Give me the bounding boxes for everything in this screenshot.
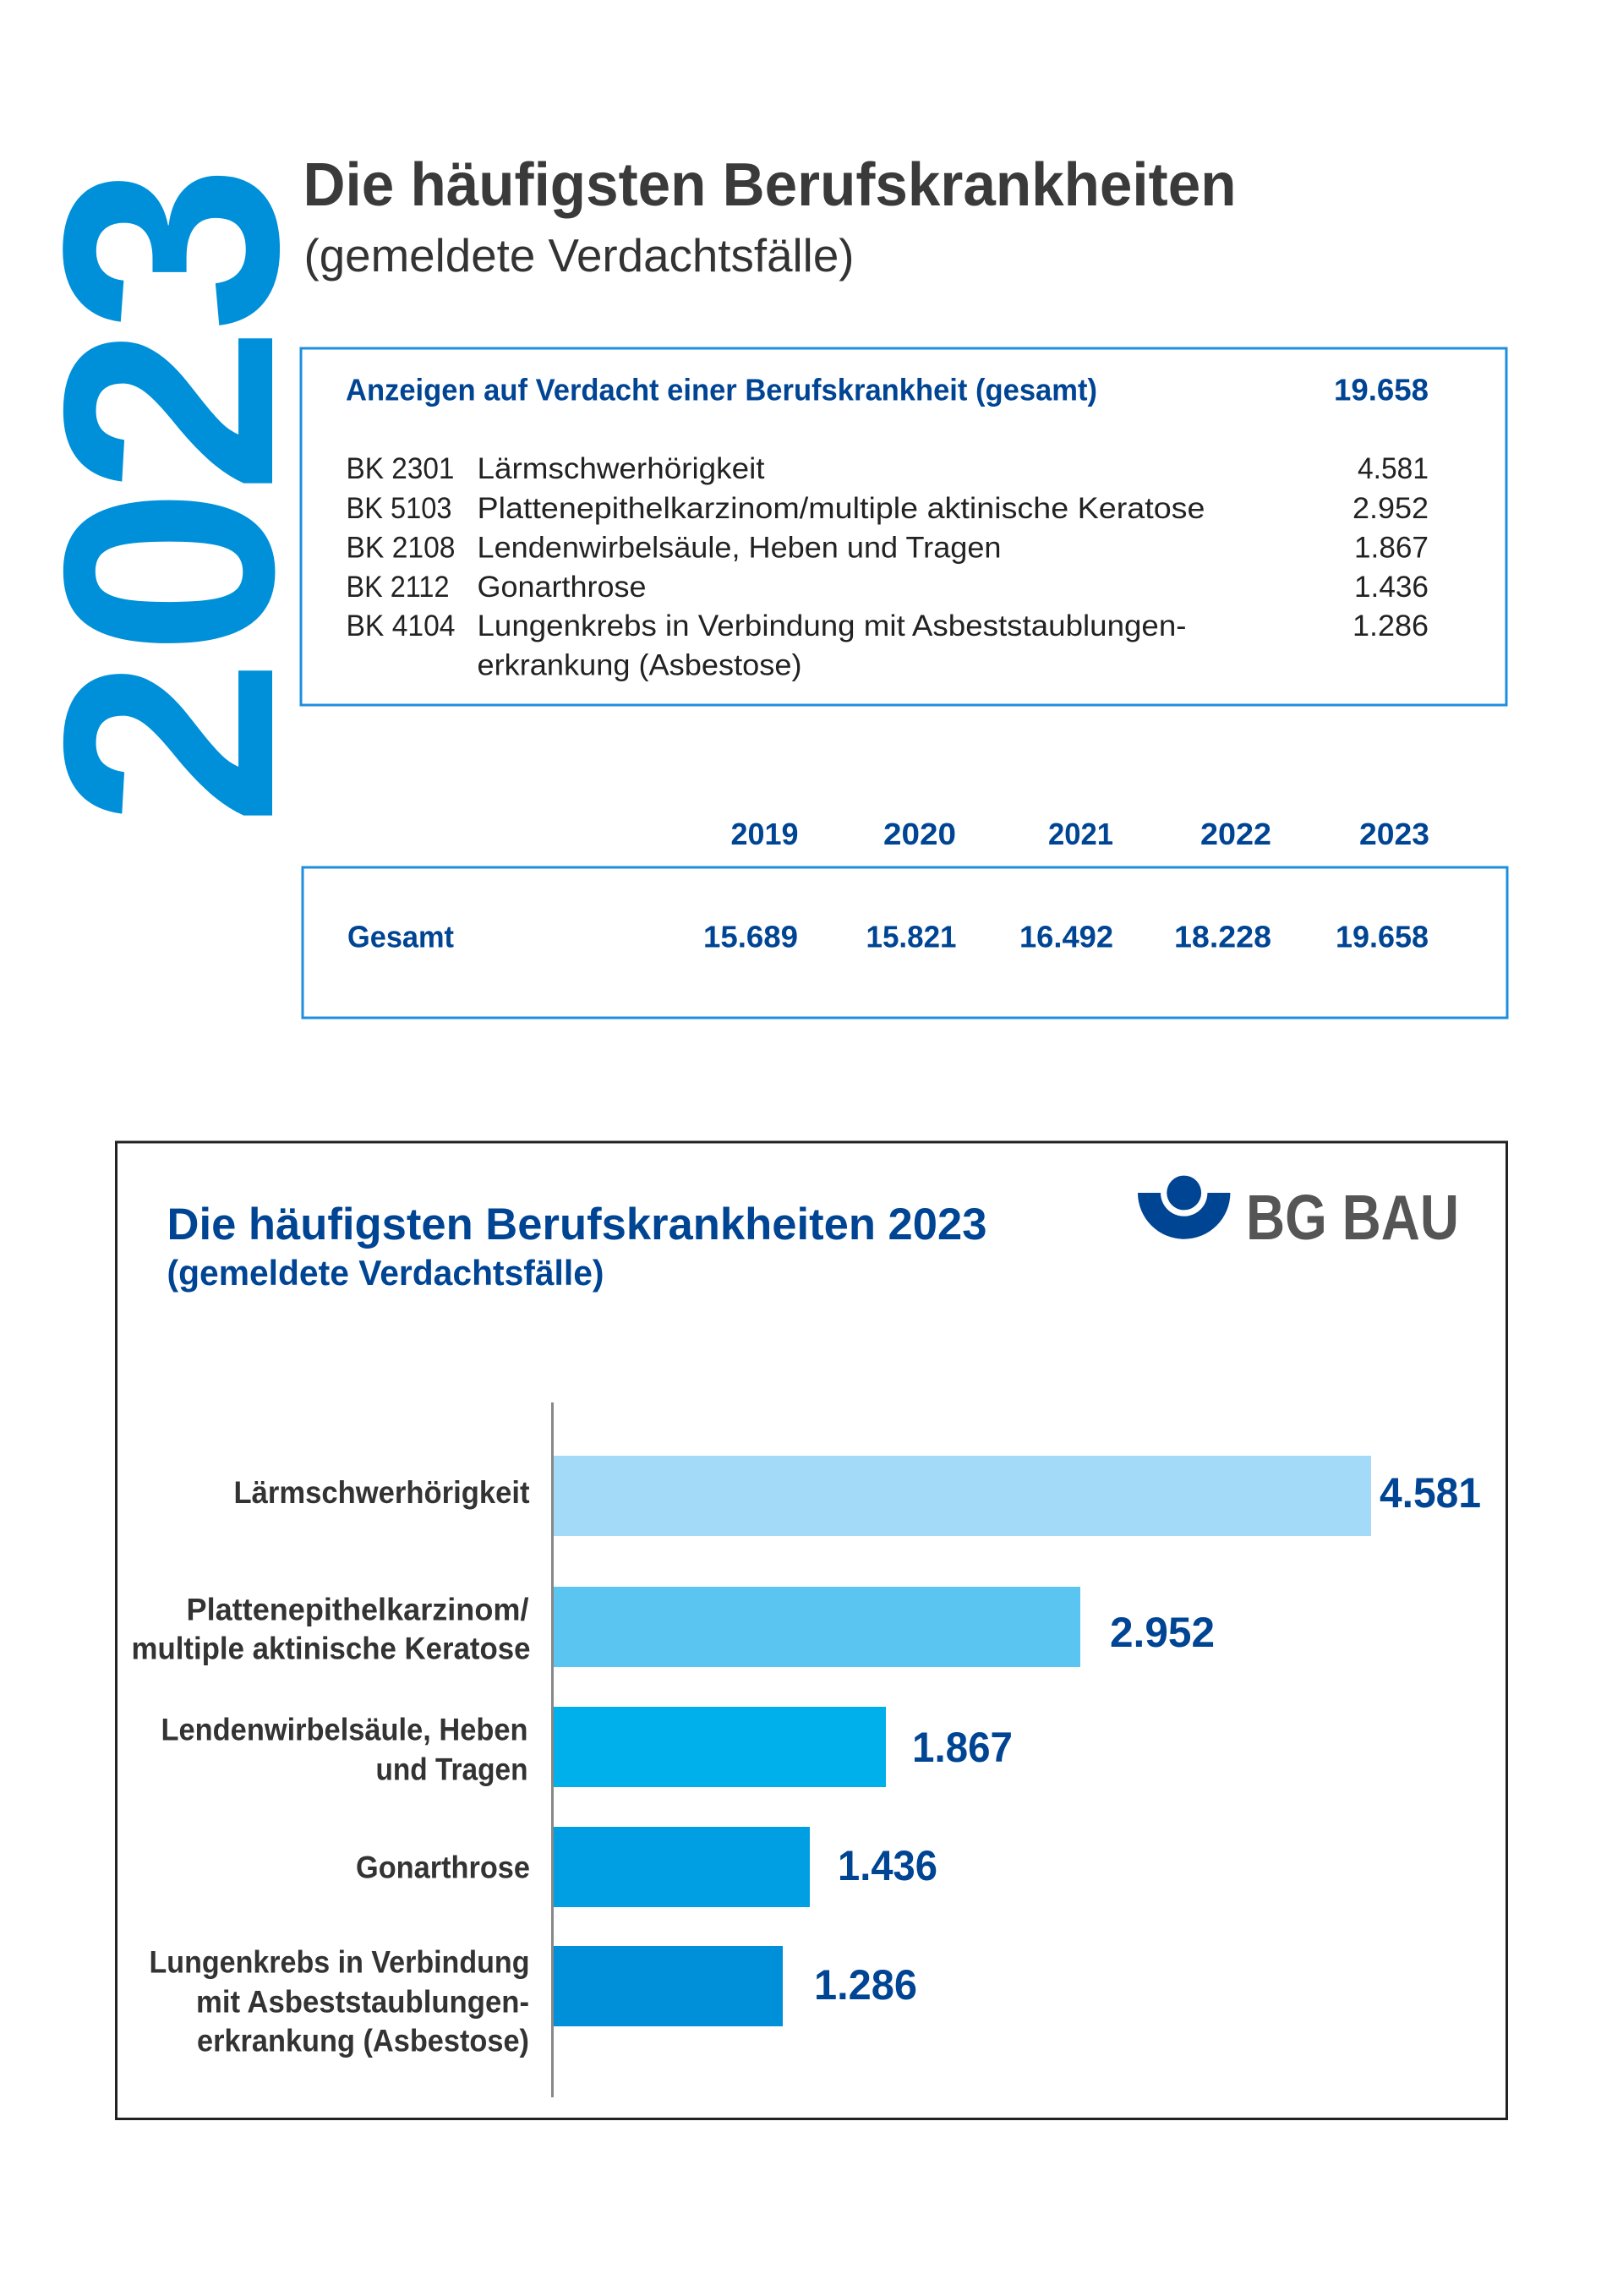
year header row: 2019 [730,817,798,851]
panel: bar chart card [117,1142,1506,2118]
totals row: Gesamt [347,920,454,954]
row: BK 4104: 1.286 [1352,609,1429,642]
bar row: Lungenkrebs: 1.286 [814,1961,917,2009]
panel: reported cases 2023 [301,348,1506,705]
row: BK 2108: 1.867 [1354,531,1429,565]
bar row: Lendenwirbelsäule: 1.867 [912,1724,1013,1771]
panel: totals per year [303,867,1507,1018]
row: BK 2108 [347,531,1429,565]
total row: 19.658 [1334,372,1429,407]
totals row: 18.228 [1174,920,1271,954]
panel border [301,348,1506,705]
bar row: Lendenwirbelsäule: und Tragen [375,1752,527,1787]
row: BK 4104: BK 4104 [347,609,455,642]
totals row: 19.658 [1336,920,1429,954]
bar row: Gonarthrose: 1.436 [838,1842,937,1889]
row: BK 2112: BK 2112 [347,570,450,604]
big rotated year 2023: 3 [0,165,342,332]
row: BK 2112: 1.436 [1354,570,1429,604]
row: BK 2108: BK 2108 [347,531,455,565]
totals row: 15.689 [703,920,798,954]
chart heading: Die häufigsten Berufskrankheiten 2023 [167,1200,987,1249]
row: BK 4104: Lungenkrebs in Verbindung mit Asbeststaublungen- [477,609,1187,642]
year header row: 2021 [1048,817,1113,851]
row: BK 2108: Lendenwirbelsäule, Heben und Tragen [477,531,1001,565]
row: BK 2301: Lärmschwerhörigkeit [477,451,765,485]
row: BK 5103 [347,491,1429,525]
year header row [730,817,1429,851]
totals row: 16.492 [1019,920,1113,954]
bar row: Plattenepithelkarzinom: 2.952 [1110,1609,1215,1656]
panel border [303,867,1507,1018]
bar row: Lungenkrebs [149,1944,917,2058]
row: BK 4104: erkrankung (Asbestose) [477,648,801,681]
bar row: Lendenwirbelsäule [161,1707,1013,1787]
bar row: Gonarthrose [356,1827,937,1907]
total row: Anzeigen auf Verdacht einer Berufskrankheit (gesamt) [346,372,1097,407]
row: BK 5103: 2.952 [1352,491,1429,525]
row: BK 2301 [347,451,1429,485]
card border [117,1142,1506,2118]
totals row [347,920,1429,954]
bar row: Lendenwirbelsäule: Lendenwirbelsäule, Heben [161,1713,527,1747]
big rotated year 2023: 0 [3,488,336,655]
year header row: 2020 [883,817,956,851]
bar row: Lärmschwerhörigkeit: 4.581 [1380,1469,1481,1517]
title block [303,151,1236,282]
row: BK 2301: BK 2301 [347,451,455,485]
bar row: Plattenepithelkarzinom: Plattenepithelkarzinom/ [186,1593,529,1626]
year header row: 2022 [1200,817,1271,851]
big rotated year 2023: 2 [3,659,336,826]
big rotated year 2023 [0,165,342,826]
row: BK 2112: Gonarthrose [477,570,646,604]
year header row: 2023 [1359,817,1429,851]
row: BK 4104 [347,609,1429,681]
subheading: (gemeldete Verdachtsfälle) [304,229,854,282]
bar row: Lungenkrebs: erkrankung (Asbestose) [197,2024,529,2058]
main heading: Die häufigsten Berufskrankheiten [303,151,1236,219]
totals row: 15.821 [866,920,957,954]
logo: BG BAU [1138,1176,1459,1253]
bar row: Lärmschwerhörigkeit: Lärmschwerhörigkeit [233,1475,529,1510]
chart subheading: (gemeldete Verdachtsfälle) [167,1253,604,1293]
bar row: Plattenepithelkarzinom: multiple aktinische Keratose [132,1632,531,1665]
bar row: Lärmschwerhörigkeit [233,1456,1481,1536]
bar row: Lungenkrebs: Lungenkrebs in Verbindung [149,1944,529,1980]
row: BK 2301: 4.581 [1358,451,1429,485]
big rotated year 2023: 2 [3,326,336,494]
row: BK 2112 [347,570,1429,604]
bar row: Gonarthrose: Gonarthrose [356,1850,530,1885]
icon: half circle with ball [1138,1176,1230,1239]
bar row: Lungenkrebs: mit Asbeststaublungen- [196,1985,529,2019]
logo wordmark: BG BAU [1246,1182,1459,1253]
row: BK 5103: Plattenepithelkarzinom/multiple aktinische Keratose [477,491,1205,525]
bar row: Plattenepithelkarzinom [132,1587,1215,1667]
row: BK 5103: BK 5103 [347,491,451,525]
chart axis [551,1402,554,2097]
